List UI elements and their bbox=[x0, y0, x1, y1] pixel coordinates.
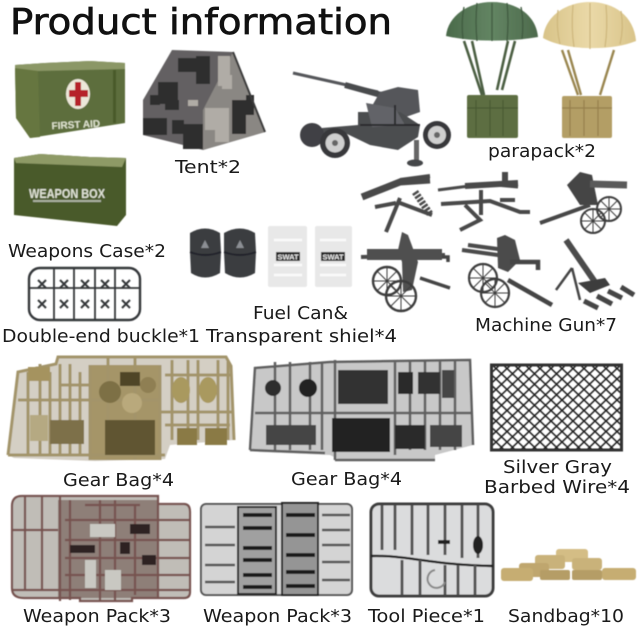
label: machine gun: Machine Gun*7 bbox=[475, 315, 617, 336]
icon: red cross badge bbox=[66, 79, 90, 109]
label: gear bag black: Gear Bag*4 bbox=[291, 469, 402, 490]
icon: double-end buckle sprue bbox=[29, 268, 140, 320]
icon: tan parapack bbox=[543, 2, 636, 138]
icon: machine gun 4 bbox=[361, 232, 450, 311]
icon: machine gun 2 bbox=[438, 172, 530, 230]
icon: mortar with shells bbox=[556, 240, 634, 308]
label: tent: Tent*2 bbox=[174, 157, 241, 178]
SWAT label right: SWAT bbox=[322, 252, 344, 262]
label: barbed wire: Barbed Wire*4 bbox=[484, 477, 630, 498]
icon: camouflage tent bbox=[143, 50, 265, 150]
icon: green parapack bbox=[446, 2, 538, 138]
label: silver gray: Silver Gray bbox=[503, 457, 612, 478]
SWAT label left: SWAT bbox=[277, 252, 299, 262]
label: double-end buckle: Double-end buckle*1 bbox=[2, 326, 200, 347]
title: Product information bbox=[10, 2, 392, 43]
icon: sandbag pile bbox=[501, 549, 636, 581]
panel: black gear bag sprue bbox=[250, 360, 473, 460]
label: tool piece: Tool Piece*1 bbox=[367, 606, 485, 627]
icon: weapon box bbox=[14, 154, 126, 226]
icon: machine gun 3 bbox=[540, 172, 627, 233]
icon: transparent shields bbox=[268, 226, 352, 287]
panel: tool piece sprue bbox=[371, 504, 493, 596]
icon: fuel cans bbox=[190, 228, 256, 278]
icon: machine gun 1 bbox=[362, 176, 432, 232]
label: sandbag: Sandbag*10 bbox=[508, 606, 624, 627]
panel: tan gear bag sprue bbox=[8, 357, 234, 461]
label: weapon pack red: Weapon Pack*3 bbox=[23, 606, 171, 627]
icon: weapon box: WEAPON BOX bbox=[29, 186, 105, 201]
label: weapons case: Weapons Case*2 bbox=[8, 241, 166, 262]
label: weapon pack black: Weapon Pack*3 bbox=[203, 606, 352, 627]
panel: red-brown weapon pack sprue bbox=[12, 496, 190, 601]
label: transparent shield: Transparent shiel*4 bbox=[205, 326, 397, 347]
icon: anti-aircraft cannon bbox=[293, 73, 451, 166]
label: gear bag tan: Gear Bag*4 bbox=[63, 470, 174, 491]
panel: barbed wire mesh bbox=[492, 365, 622, 450]
label: parapack: parapack*2 bbox=[488, 141, 596, 162]
icon: first aid box bbox=[15, 61, 125, 138]
icon: wheels bbox=[300, 121, 451, 158]
icon: machine gun 5 bbox=[462, 235, 552, 307]
label: fuel can: Fuel Can& bbox=[253, 303, 348, 324]
panel: black weapon pack sprue bbox=[201, 503, 352, 595]
icon: first aid box: FIRST AID bbox=[51, 119, 100, 132]
